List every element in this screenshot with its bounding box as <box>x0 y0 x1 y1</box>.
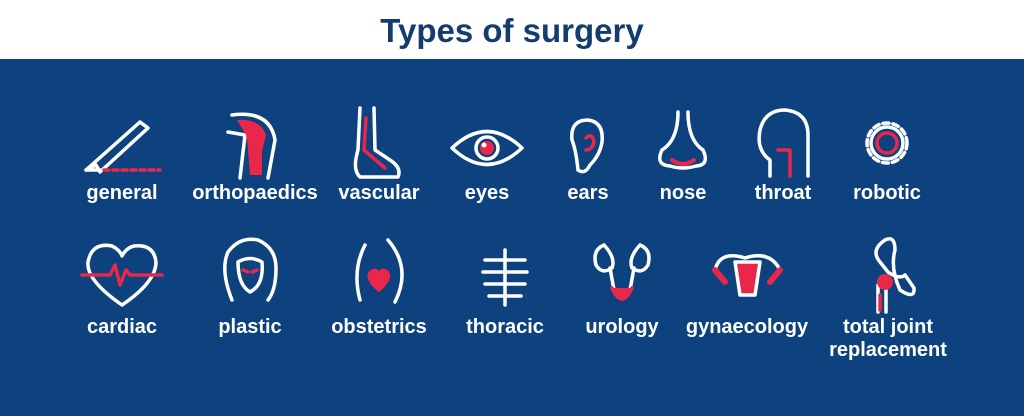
labels: gynaecology <box>686 316 809 338</box>
labels: replacement <box>829 339 947 361</box>
labels: total joint <box>843 316 933 338</box>
icon: gear <box>867 123 907 163</box>
labels: throat <box>755 182 812 204</box>
icon: scalpel <box>86 122 160 172</box>
labels: plastic <box>218 316 282 338</box>
icon: heart <box>82 245 162 305</box>
labels: robotic <box>853 182 921 204</box>
labels: vascular <box>338 182 420 204</box>
icon: face <box>225 239 276 300</box>
labels: thoracic <box>466 316 544 338</box>
icon: ear <box>572 120 602 172</box>
labels: cardiac <box>87 316 157 338</box>
icon: knee <box>228 114 275 178</box>
labels: eyes <box>465 182 509 204</box>
labels <box>86 182 947 361</box>
labels: nose <box>660 182 706 204</box>
labels: obstetrics <box>331 316 427 338</box>
icon: nose <box>660 112 705 168</box>
labels: general <box>86 182 158 204</box>
icon: ribcage <box>483 250 527 305</box>
icon: eye <box>452 132 522 164</box>
icon: uterus <box>715 256 780 295</box>
icon: hip <box>876 239 914 312</box>
icon: leg <box>355 108 399 177</box>
labels: orthopaedics <box>192 182 318 204</box>
labels: urology <box>585 316 660 338</box>
icon: throat <box>759 110 808 176</box>
icon: pregnant <box>357 240 402 302</box>
icon: kidneys <box>595 245 649 299</box>
title: Types of surgery <box>380 12 644 49</box>
labels: ears <box>567 182 609 204</box>
